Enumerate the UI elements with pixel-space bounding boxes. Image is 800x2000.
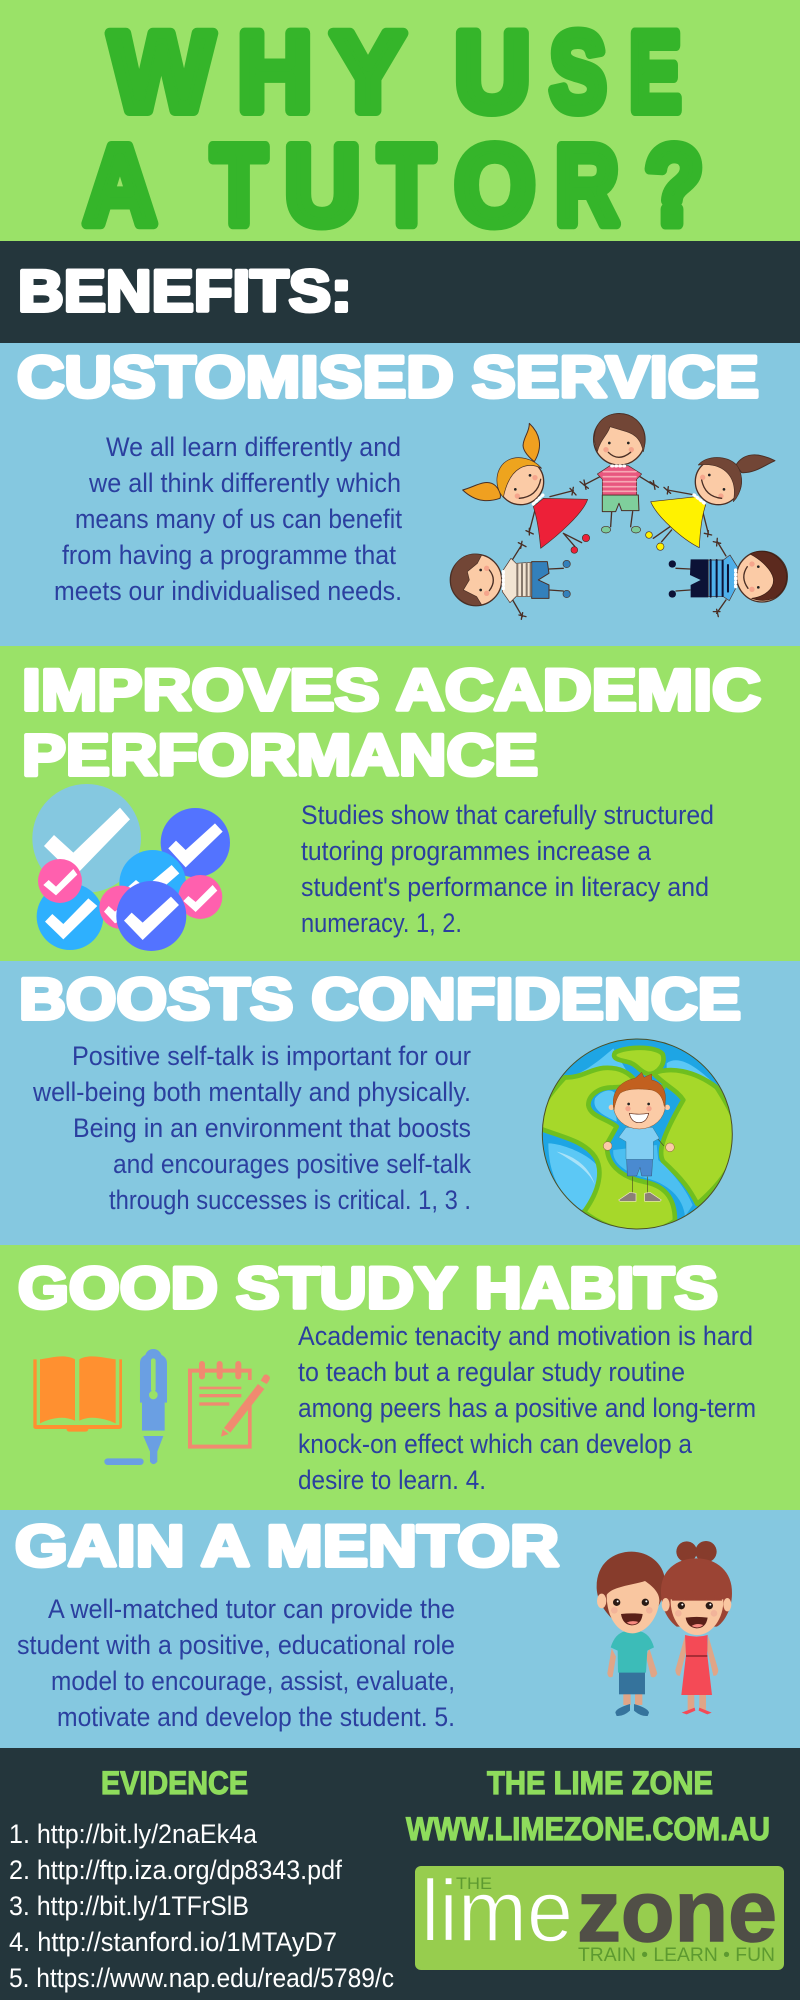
title: S bbox=[550, 10, 606, 134]
title: Y bbox=[331, 10, 403, 134]
heading: website: WWW.LIMEZONE.COM.AU bbox=[406, 1811, 770, 1847]
title: H bbox=[238, 10, 312, 134]
title: A bbox=[84, 123, 154, 248]
text: customised service body: We all learn differently and bbox=[106, 432, 401, 462]
icon: girl in yellow dress bbox=[646, 455, 775, 550]
icon: notepad and pencil bbox=[188, 1361, 270, 1449]
text: customised service body: means many of us can benefit bbox=[75, 504, 402, 534]
text: good study habits body bbox=[298, 1321, 756, 1495]
title: E bbox=[629, 10, 681, 134]
text: improves academic performance body: numeracy. 1, 2. bbox=[301, 908, 462, 938]
title: T bbox=[379, 123, 434, 248]
title bbox=[84, 10, 703, 248]
text: gain a mentor body: model to encourage, assist, evaluate, bbox=[51, 1666, 455, 1696]
logo: the lime zone: THE bbox=[456, 1874, 492, 1893]
panel: good study habits bbox=[0, 1245, 800, 1510]
heading: improves academic performance: IMPROVES ACADEMIC bbox=[22, 658, 761, 723]
title: W bbox=[110, 10, 213, 134]
title: T bbox=[212, 123, 266, 248]
icon: boy mentor bbox=[597, 1552, 665, 1716]
title: U bbox=[455, 10, 530, 134]
panel: boosts confidence bbox=[0, 961, 800, 1245]
panel: improves academic performance bbox=[0, 646, 800, 961]
text: boosts confidence body: well-being both mentally and physically. bbox=[32, 1077, 471, 1107]
text: gain a mentor body: A well-matched tutor can provide the bbox=[48, 1594, 455, 1624]
panel: benefits banner bbox=[0, 241, 800, 343]
text: good study habits body: to teach but a regular study routine bbox=[298, 1357, 685, 1387]
text: customised service body bbox=[54, 432, 402, 606]
icon: children holding hands bbox=[450, 414, 787, 619]
title: O bbox=[455, 123, 535, 248]
text: evidence links bbox=[9, 1819, 394, 1993]
text: improves academic performance body: tutoring programmes increase a bbox=[301, 836, 652, 866]
icon: boy and girl mentors bbox=[597, 1541, 732, 1716]
text: good study habits body: Academic tenacity and motivation is hard bbox=[298, 1321, 753, 1351]
logo: the lime zone: zone bbox=[577, 1863, 777, 1960]
panel: gain a mentor bbox=[0, 1510, 800, 1748]
icon: girl in red dress bbox=[463, 423, 590, 553]
text: boosts confidence body bbox=[32, 1041, 471, 1215]
logo: the lime zone: TRAIN • LEARN • FUN bbox=[578, 1945, 775, 1966]
text: evidence links: 3. http://bit.ly/1TFrSlB bbox=[9, 1891, 249, 1921]
text: customised service body: we all think differently which bbox=[88, 468, 401, 498]
icon: boy on a globe bbox=[537, 1039, 737, 1232]
heading: good study habits: GOOD STUDY HABITS bbox=[18, 1256, 718, 1321]
text: evidence links: 5. https://www.nap.edu/read/5789/c bbox=[9, 1963, 394, 1993]
icon: boy lower left bbox=[450, 541, 570, 619]
text: improves academic performance body bbox=[301, 800, 714, 938]
icon: open book bbox=[33, 1356, 122, 1432]
icon: study tools bbox=[33, 1349, 270, 1465]
text: evidence links: 2. http://ftp.iza.org/dp8343.pdf bbox=[9, 1855, 342, 1885]
title: U bbox=[285, 123, 360, 248]
heading: improves academic performance: PERFORMANCE bbox=[22, 723, 538, 788]
text: boosts confidence body: and encourages positive self-talk bbox=[113, 1149, 471, 1179]
text: boosts confidence body: Being in an environment that boosts bbox=[73, 1113, 471, 1143]
panel: footer bbox=[0, 1748, 800, 2000]
panel: customised service bbox=[0, 343, 800, 646]
text: gain a mentor body bbox=[17, 1594, 455, 1732]
text: customised service body: from having a programme that bbox=[62, 540, 396, 570]
icon: boy lower right bbox=[669, 538, 787, 617]
title: ? bbox=[645, 123, 703, 248]
heading: evidence: EVIDENCE bbox=[101, 1765, 248, 1801]
text: customised service body: meets our individualised needs. bbox=[54, 576, 402, 606]
heading: benefits: BENEFITS: bbox=[18, 259, 352, 324]
icon: fountain pen bbox=[104, 1349, 167, 1465]
text: improves academic performance body: student's performance in literacy and bbox=[301, 872, 709, 902]
logo: the lime zone: lime bbox=[421, 1863, 573, 1960]
heading: customised service: CUSTOMISED SERVICE bbox=[17, 345, 759, 410]
text: good study habits body: among peers has a positive and long-term bbox=[298, 1393, 756, 1423]
text: evidence links: 1. http://bit.ly/2naEk4a bbox=[9, 1819, 258, 1849]
logo: the lime zone bbox=[415, 1863, 784, 1970]
icon: boy in the middle bbox=[580, 414, 658, 533]
text: good study habits body: knock-on effect which can develop a bbox=[298, 1429, 693, 1459]
text: boosts confidence body: Positive self-talk is important for our bbox=[72, 1041, 471, 1071]
icon: check mark badges bbox=[32, 784, 230, 951]
text: gain a mentor body: motivate and develop the student. 5. bbox=[57, 1702, 455, 1732]
text: evidence links: 4. http://stanford.io/1MTAyD7 bbox=[9, 1927, 337, 1957]
title: R bbox=[555, 123, 619, 248]
text: improves academic performance body: Studies show that carefully structured bbox=[301, 800, 714, 830]
heading: the lime zone: THE LIME ZONE bbox=[487, 1765, 713, 1801]
panel: title header bbox=[0, 0, 800, 248]
heading: boosts confidence: BOOSTS CONFIDENCE bbox=[19, 967, 741, 1032]
text: good study habits body: desire to learn. 4. bbox=[298, 1465, 486, 1495]
icon: girl mentor bbox=[661, 1541, 732, 1714]
heading: improves academic performance bbox=[22, 658, 761, 788]
heading: gain a mentor: GAIN A MENTOR bbox=[15, 1514, 559, 1579]
text: gain a mentor body: student with a positive, educational role bbox=[17, 1630, 455, 1660]
text: boosts confidence body: through successes is critical. 1, 3 . bbox=[109, 1185, 471, 1215]
